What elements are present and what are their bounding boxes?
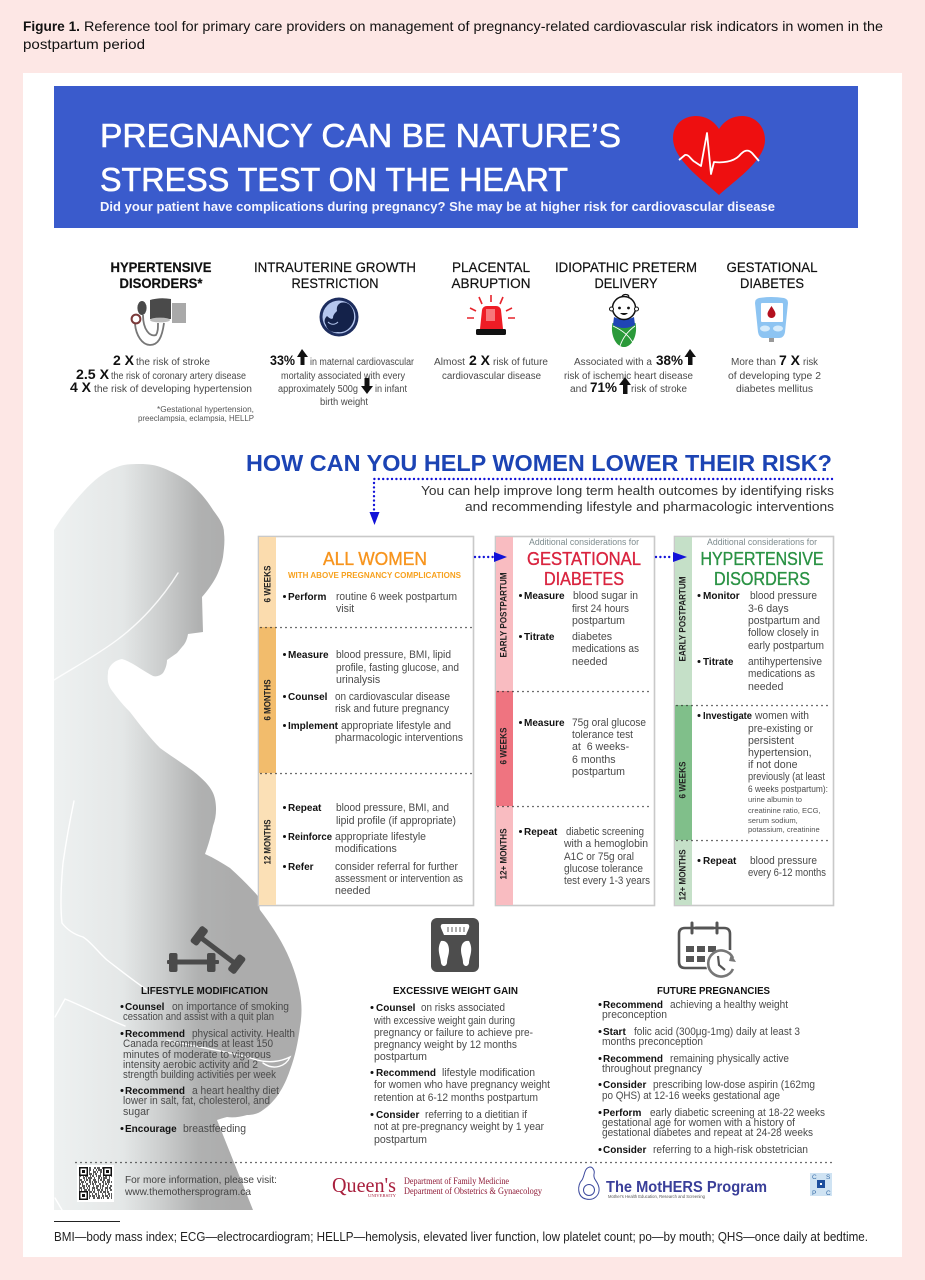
risk text: in maternal cardiovascular [310, 357, 415, 368]
6 week actions [519, 717, 646, 778]
early postpartum actions: postpartum [572, 615, 625, 627]
heading [254, 260, 416, 291]
icon: down arrow [361, 378, 373, 394]
figure caption: Figure 1. [23, 18, 80, 34]
bullet list: Perform [603, 1108, 641, 1119]
timeline strip: 6 weeks: 6 WEEKS [262, 566, 272, 602]
risk text: cardiovascular disease [442, 371, 541, 382]
6 week actions: potassium, creatinine [748, 825, 820, 834]
12+ month actions [698, 855, 826, 879]
icon: red siren [467, 295, 515, 335]
arrow: all women to gestational diabetes [475, 552, 507, 562]
icon: up arrow [297, 349, 308, 365]
early postpartum actions [698, 590, 824, 693]
12 month actions: blood pressure, BMI, and [336, 802, 449, 814]
arrow: heading to all women panel [370, 479, 832, 525]
bullet list: Recommend [376, 1068, 436, 1079]
risk text: 38% [656, 352, 684, 368]
risk text: risk of stroke [631, 384, 687, 395]
bullet list: Recommend [125, 1086, 185, 1097]
risk text [270, 349, 415, 408]
6 week actions: routine 6 week postpartum [336, 591, 457, 603]
arrow: gestational diabetes to hypertensive disorders [656, 552, 687, 562]
icon: blood pressure cuff [132, 298, 186, 345]
heading: EXCESSIVE WEIGHT GAIN [393, 985, 518, 997]
column: idiopathic preterm delivery [555, 260, 697, 395]
12 month actions: lipid profile (if appropriate) [336, 815, 456, 827]
bullet list: on importance of smoking [172, 1001, 289, 1013]
heading [726, 260, 818, 291]
6 week actions: creatinine ratio, ECG, [748, 806, 821, 815]
panel: hypertensive disorders [674, 536, 834, 906]
bullet list: intensity aerobic activity and 2 [123, 1059, 258, 1071]
bullet list: referring to a dietitian if [425, 1109, 527, 1121]
section intro text: and recommending lifestyle and pharmacologic interventions [465, 499, 834, 514]
icon: fetus [320, 298, 358, 336]
6 week actions: Measure [524, 718, 565, 729]
bullet list: a heart healthy diet [192, 1085, 279, 1097]
heading: INTRAUTERINE GROWTH [254, 260, 416, 275]
footnote: hypertensive disorders: preeclampsia, eclampsia, HELLP [138, 413, 254, 423]
logo: CSPC: S [826, 1174, 831, 1181]
6 week actions: if not done [748, 759, 798, 771]
early postpartum actions: needed [748, 681, 783, 693]
bullet list: breastfeeding [183, 1123, 246, 1135]
heading: HYPERTENSIVE [110, 260, 212, 275]
figure caption: postpartum period [23, 36, 145, 52]
column: placental abruption [434, 260, 548, 382]
bullet list: Consider [603, 1145, 646, 1156]
pregnant silhouette [54, 464, 302, 1210]
6 month actions: pharmacologic interventions [335, 732, 463, 744]
risk text: and [570, 384, 587, 395]
logo: The MotHERS Program [579, 1167, 767, 1199]
banner title [100, 117, 621, 198]
6 month actions [283, 649, 463, 744]
section: lifestyle modification [120, 925, 295, 1135]
bullet list: for women who have pregnancy weight [374, 1079, 550, 1091]
heading: DELIVERY [594, 276, 658, 291]
heading: ABRUPTION [452, 276, 530, 291]
heading: IDIOPATHIC PRETERM [555, 260, 697, 275]
6 month actions: risk and future pregnancy [335, 703, 450, 715]
heading: FUTURE PREGNANCIES [657, 985, 770, 997]
risk figures: 2.5 X [76, 366, 110, 382]
timeline strip: early postpartum [675, 537, 692, 705]
heading [452, 260, 530, 291]
section: future pregnancies [598, 923, 825, 1156]
icon: heart with ECG trace [673, 116, 765, 195]
12+ month actions: with a hemoglobin [563, 838, 648, 850]
bullet list: preconception [602, 1009, 667, 1021]
6 week actions: urine albumin to [748, 795, 802, 804]
logo: Queen's University [332, 1173, 542, 1198]
panel title: DIABETES [544, 569, 624, 589]
panel: gestational diabetes [496, 536, 654, 906]
6 month actions: appropriate lifestyle and [341, 720, 451, 732]
early postpartum actions: postpartum and [748, 615, 820, 627]
heading: LIFESTYLE MODIFICATION [141, 985, 268, 997]
logo: The MotHERS Program: The MotHERS Program [606, 1179, 767, 1196]
12+ month actions: Repeat [703, 856, 737, 867]
early postpartum actions: medications as [572, 643, 639, 655]
heading [110, 260, 212, 291]
6 month actions: Implement [288, 721, 339, 732]
heading: DIABETES [740, 276, 804, 291]
bullet list [370, 1002, 550, 1146]
bullet list: Counsel [376, 1003, 416, 1014]
panel title: HYPERTENSIVE [700, 549, 824, 569]
icon: bathroom scale [431, 918, 479, 972]
6 week actions: serum sodium, [748, 816, 798, 825]
6 month actions: urinalysis [336, 674, 380, 686]
bullet list: po QHS) at 12-16 weeks gestational age [602, 1090, 780, 1102]
bullet list: Consider [603, 1080, 646, 1091]
column: intrauterine growth restriction [254, 260, 416, 408]
heading: PLACENTAL [452, 260, 530, 275]
early postpartum actions: blood sugar in [573, 590, 638, 602]
early postpartum actions: diabetes [572, 631, 612, 643]
risk text: birth weight [320, 397, 368, 408]
risk figures [70, 352, 252, 395]
12 month actions: modifications [335, 843, 397, 855]
timeline strip: 6 weeks [675, 705, 692, 840]
early postpartum actions: first 24 hours [572, 603, 629, 615]
panel title [527, 537, 641, 589]
bullet list [598, 999, 825, 1156]
icon: swaddled baby [610, 295, 638, 347]
bullet list: not at pre-pregnancy weight by 1 year [374, 1121, 544, 1133]
bullet list: lifestyle modification [442, 1067, 535, 1079]
banner subtitle: Did your patient have complications during pregnancy? She may be at higher risk for cardiovascular disease [100, 199, 775, 214]
bullet list: folic acid (300μg-1mg) daily at least 3 [634, 1026, 800, 1038]
6 week actions: visit [336, 603, 354, 615]
timeline strip: early postpartum: EARLY POSTPARTUM [498, 572, 508, 658]
6 week actions: Perform [288, 592, 326, 603]
timeline strip: 12+ months: 12+ MONTHS [498, 828, 508, 880]
risk text: in infant [375, 384, 407, 395]
risk text: of developing type 2 [728, 371, 821, 382]
6 month actions: Measure [288, 650, 329, 661]
bullet list: Start [603, 1027, 626, 1038]
heading [555, 260, 697, 291]
figure caption: Reference tool for primary care providers on management of pregnancy-related cardiovascular risk indicators in women in the [84, 18, 883, 34]
bullet list: minutes of moderate to vigorous [123, 1049, 271, 1061]
12 month actions: appropriate lifestyle [335, 831, 426, 843]
bullet list: lower in salt, fat, cholesterol, and [123, 1095, 270, 1107]
bullet list: Counsel [125, 1002, 165, 1013]
early postpartum actions: blood pressure [750, 590, 817, 602]
logo: Queen's University: Queen's [332, 1173, 396, 1197]
bullet list: cessation and assist with a quit plan [123, 1011, 274, 1023]
logo: CSPC: C [826, 1190, 831, 1197]
risk figures: the risk of developing hypertension [94, 384, 252, 395]
risk text: risk of future [493, 357, 548, 368]
early postpartum actions: early postpartum [748, 640, 824, 652]
bullet list: postpartum [374, 1051, 427, 1063]
bullet list: remaining physically active [670, 1053, 789, 1065]
icon: glucose meter [755, 297, 788, 342]
section heading: HOW CAN YOU HELP WOMEN LOWER THEIR RISK? [246, 450, 832, 476]
risk figures: the risk of stroke [136, 357, 210, 368]
more information text: For more information, please visit: [125, 1174, 277, 1186]
6 week actions: women with [754, 710, 809, 722]
risk text [564, 349, 696, 395]
logo: CSPC [810, 1173, 832, 1197]
bullet list: prescribing low-dose aspirin (162mg [653, 1079, 815, 1091]
bullet list: gestational diabetes and repeat at 24-28 weeks [602, 1127, 813, 1139]
12+ month actions: diabetic screening [566, 826, 644, 838]
12 month actions: assessment or intervention as [335, 873, 463, 885]
early postpartum actions: Measure [524, 591, 565, 602]
bullet list: referring to a high-risk obstetrician [653, 1144, 808, 1156]
bullet list: months preconception [602, 1036, 703, 1048]
12+ month actions: test every 1-3 years [564, 875, 650, 887]
6 week actions: postpartum [572, 766, 625, 778]
risk text: Associated with a [574, 357, 652, 368]
12 month actions: consider referral for further [335, 861, 458, 873]
12+ month actions: blood pressure [750, 855, 817, 867]
early postpartum actions: Monitor [703, 591, 740, 602]
risk text: 33% [270, 352, 295, 368]
risk text: More than [731, 357, 776, 368]
timeline strip: 6 weeks: 6 WEEKS [678, 762, 688, 798]
risk text: 71% [590, 379, 618, 395]
6 month actions: on cardiovascular disease [335, 691, 450, 703]
panel title: ALL WOMEN [323, 549, 427, 569]
12 month actions: Refer [288, 862, 314, 873]
6 week actions: at 6 weeks- [572, 741, 630, 753]
early postpartum actions: Titrate [703, 657, 734, 668]
risk text: Almost [434, 357, 465, 368]
risk figures: 2 X [113, 352, 135, 368]
timeline strip: 12 months [259, 773, 276, 905]
bullet list: postpartum [374, 1134, 427, 1146]
timeline strip: 12+ months [675, 840, 692, 905]
bullet list: Consider [376, 1110, 419, 1121]
timeline strip: 6 weeks [496, 691, 513, 806]
risk text [728, 352, 821, 395]
6 week actions: pre-existing or [748, 723, 813, 735]
risk text: approximately 500g [278, 384, 358, 395]
bullet list: strength building activities per week [123, 1069, 277, 1081]
timeline strip: early postpartum [496, 537, 513, 691]
section intro text: You can help improve long term health outcomes by identifying risks [421, 483, 834, 498]
bullet list: sugar [123, 1106, 150, 1118]
6 week actions: previously (at least [748, 771, 825, 783]
6 week actions: hypertension, [748, 747, 812, 759]
risk figures: 4 X [70, 379, 92, 395]
timeline strip: early postpartum: EARLY POSTPARTUM [678, 576, 688, 662]
6 month actions: profile, fasting glucose, and [336, 662, 459, 674]
6 month actions: Counsel [288, 692, 328, 703]
bullet list: physical activity. Health [192, 1028, 295, 1040]
timeline strip: 6 weeks [259, 537, 276, 627]
risk text: mortality associated with every [281, 371, 405, 382]
heading: GESTATIONAL [726, 260, 818, 275]
risk text [434, 352, 548, 382]
early postpartum actions: follow closely in [748, 627, 819, 639]
early postpartum actions: medications as [748, 668, 815, 680]
panel title [700, 537, 824, 589]
risk text: risk of ischemic heart disease [564, 371, 693, 382]
risk text: 7 X [779, 352, 801, 368]
section: excessive weight gain [370, 918, 550, 1146]
timeline strip: 12+ months [496, 806, 513, 905]
column: hypertensive disorders [70, 260, 254, 423]
early postpartum actions [519, 590, 639, 668]
risk text: risk [803, 357, 819, 368]
timeline strip: 6 weeks: 6 WEEKS [498, 728, 508, 764]
bullet list: throughout pregnancy [602, 1063, 703, 1075]
early postpartum actions: antihypertensive [748, 656, 822, 668]
risk figures: the risk of coronary artery disease [111, 371, 246, 382]
icon: up arrow [619, 377, 631, 394]
12+ month actions: every 6-12 months [748, 867, 826, 879]
12 month actions: Repeat [288, 803, 322, 814]
6 month actions: blood pressure, BMI, lipid [336, 649, 451, 661]
bullet list: Recommend [603, 1054, 663, 1065]
footnote: hypertensive disorders [138, 404, 254, 423]
bullet list: early diabetic screening at 18-22 weeks [650, 1107, 825, 1119]
icon: calendar with clock [679, 923, 736, 978]
banner title: PREGNANCY CAN BE NATURE’S [100, 117, 621, 154]
12+ month actions: Repeat [524, 827, 558, 838]
heading: RESTRICTION [292, 276, 378, 291]
bullet list: pregnancy or failure to achieve pre- [374, 1027, 533, 1039]
figure caption [23, 18, 883, 52]
column: gestational diabetes [726, 260, 821, 395]
panel title: Additional considerations for [707, 537, 817, 547]
logo: Queen's University: Department of Family Medicine [404, 1176, 509, 1186]
icon: dumbbells [167, 925, 246, 975]
section intro text [421, 483, 834, 514]
12+ month actions: glucose tolerance [564, 863, 643, 875]
12 month actions [283, 802, 463, 897]
timeline strip: 12 months: 12 MONTHS [262, 820, 272, 864]
bullet list: retention at 6-12 months postpartum [374, 1092, 538, 1104]
more information text [124, 1174, 277, 1198]
bullet list: Recommend [125, 1029, 185, 1040]
bullet list: pregnancy weight by 12 months [374, 1039, 517, 1051]
bullet list: achieving a healthy weight [670, 999, 788, 1011]
bullet list: gestational age for women with a history of [602, 1117, 795, 1129]
logo: The MotHERS Program: Mother's Health Education, Research and Screening [608, 1194, 705, 1199]
12 month actions: Reinforce [288, 832, 332, 843]
logo: CSPC: P [812, 1190, 816, 1197]
bullet list: Encourage [125, 1124, 177, 1135]
risk text: 2 X [469, 352, 491, 368]
more information text: www.themothersprogram.ca [124, 1186, 251, 1198]
timeline strip: 12+ months: 12+ MONTHS [678, 850, 688, 900]
6 week actions: Investigate [703, 711, 752, 722]
6 week actions: tolerance test [572, 729, 633, 741]
early postpartum actions: Titrate [524, 632, 555, 643]
timeline strip: 6 months: 6 MONTHS [262, 680, 272, 720]
panel title: Additional considerations for [529, 537, 639, 547]
timeline strip: 6 months [259, 627, 276, 773]
bullet list: on risks associated [421, 1002, 505, 1014]
6 week actions [283, 591, 457, 615]
bullet list: with excessive weight gain during [373, 1015, 515, 1027]
icon: up arrow [684, 349, 696, 365]
early postpartum actions: 3-6 days [748, 603, 789, 615]
footnote: hypertensive disorders: *Gestational hypertension, [157, 404, 254, 414]
6 week actions: 75g oral glucose [572, 717, 646, 729]
heading: DISORDERS* [120, 276, 203, 291]
bullet list: Recommend [603, 1000, 663, 1011]
header banner [54, 86, 858, 228]
logo: Queen's University: Department of Obstetrics & Gynaecology [404, 1186, 542, 1196]
12+ month actions [519, 826, 650, 887]
6 week actions: 6 weeks postpartum): [748, 784, 828, 795]
panel: all women [258, 536, 474, 906]
banner title: STRESS TEST ON THE HEART [100, 161, 568, 198]
panel title [288, 549, 461, 580]
6 week actions: persistent [748, 735, 794, 747]
bullet list: Canada recommends at least 150 [123, 1038, 273, 1050]
panel title: GESTATIONAL [527, 549, 641, 569]
logo: Queen's University: UNIVERSITY [368, 1194, 396, 1198]
12+ month actions: A1C or 75g oral [564, 851, 634, 863]
panel title: DISORDERS [714, 569, 810, 589]
panel title: WITH ABOVE PREGNANCY COMPLICATIONS [288, 570, 461, 580]
logo: CSPC: C [812, 1174, 817, 1181]
6 week actions [698, 710, 828, 834]
risk text: diabetes mellitus [736, 384, 813, 395]
bullet list [120, 1001, 295, 1135]
6 week actions: 6 months [572, 754, 616, 766]
12 month actions: needed [335, 885, 370, 897]
early postpartum actions: needed [572, 656, 607, 668]
QR code [77, 1165, 114, 1202]
